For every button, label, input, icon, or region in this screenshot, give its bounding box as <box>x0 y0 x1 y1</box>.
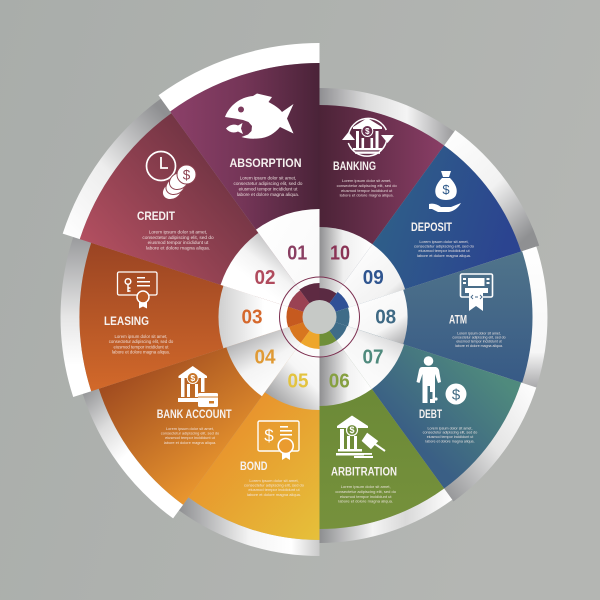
text: atm description: Lorem ipsum dolor sit amet, <box>457 331 501 335</box>
number 09: 09 <box>363 266 384 289</box>
panel: credit <box>63 99 320 317</box>
icon: bank with circular arrows <box>342 118 394 156</box>
number 05: 05 <box>288 370 308 392</box>
text: credit description: eiusmod tempor incididunt ut <box>148 240 209 246</box>
icon: person with ball and chain and coin <box>416 356 466 404</box>
icon: bank with gavel: $ <box>349 425 355 435</box>
heading: credit: CREDIT <box>137 209 176 223</box>
heading: arbitration: ARBITRATION <box>331 465 397 479</box>
text: banking description: eiusmod tempor incididunt ut <box>341 188 393 193</box>
text: credit description: labore et dolore magna aliqua. <box>146 246 210 252</box>
icon: bank with circular arrows: $ <box>365 127 370 136</box>
text: arbitration description: labore et dolore magna aliqua. <box>338 498 393 504</box>
heading: bond: BOND <box>240 459 268 473</box>
icon: bank with credit card <box>178 366 218 407</box>
icon: bond certificate: $ <box>264 426 274 445</box>
text: absorption description: consectetur adipiscing elit, sed do <box>234 181 303 186</box>
number 02: 02 <box>254 266 276 289</box>
panel: debt <box>320 317 536 502</box>
heading: leasing: LEASING <box>104 314 149 328</box>
heading: atm: ATM <box>449 313 467 327</box>
text: leasing description: Lorem ipsum dolor sit amet, <box>114 334 168 339</box>
panel: banking <box>320 88 454 317</box>
text: deposit description: eiusmod tempor incididunt ut <box>418 248 470 253</box>
text: bond description: Lorem ipsum dolor sit amet, <box>249 478 299 483</box>
heading: deposit: DEPOSIT <box>411 220 453 234</box>
icon: atm machine <box>460 274 492 311</box>
text: leasing description: consectetur adipiscing elit, sed do <box>109 339 174 344</box>
icon: bank with gavel <box>336 416 385 458</box>
icon: clock and coins: $ <box>183 168 191 182</box>
text: leasing description: labore et dolore magna aliqua. <box>112 350 170 354</box>
text: debt description: eiusmod tempor incididunt ut <box>427 435 473 439</box>
text: debt description: consectetur adipiscing elit, sed do <box>423 431 477 435</box>
panel: bond <box>179 317 320 556</box>
text: bank account description: Lorem ipsum dolor sit amet, <box>166 426 214 431</box>
icon: bank with credit card: $ <box>190 373 195 383</box>
icon: big fish eating small fish <box>225 94 294 139</box>
text: arbitration description: Lorem ipsum dolor sit amet, <box>341 484 391 489</box>
text: leasing description: eiusmod tempor incididunt ut <box>114 344 169 350</box>
text: absorption description: Lorem ipsum dolor sit amet, <box>240 176 296 180</box>
number 08: 08 <box>375 306 396 328</box>
text: absorption description: labore et dolore magna aliqua. <box>237 192 299 197</box>
text: absorption description: eiusmod tempor incididunt ut <box>239 186 298 191</box>
text: bond description: consectetur adipiscing elit, sed do <box>244 482 305 488</box>
inner numbered wheel <box>218 209 408 410</box>
panel: absorption <box>158 43 320 317</box>
text: atm description: consectetur adipiscing elit, sed do <box>452 336 506 340</box>
text: banking description: Lorem ipsum dolor sit amet, <box>342 178 391 183</box>
panel: arbitration <box>320 317 452 543</box>
panel: leasing <box>61 237 320 397</box>
text: debt description: Lorem ipsum dolor sit amet, <box>428 426 472 430</box>
text: atm description: eiusmod tempor incididunt ut <box>456 340 502 344</box>
text: deposit description: labore et dolore magna aliqua. <box>417 253 471 258</box>
text: arbitration description: eiusmod tempor incididunt ut <box>340 494 392 499</box>
text: atm description: labore et dolore magna aliqua. <box>455 344 503 348</box>
heading: bank account: BANK ACCOUNT <box>157 407 232 421</box>
icon: person with ball and chain and coin: $ <box>452 386 461 404</box>
text: credit description: Lorem ipsum dolor sit amet, <box>149 230 207 236</box>
number 07: 07 <box>362 346 384 368</box>
text: bank account description: eiusmod tempor incididunt ut <box>165 435 216 440</box>
panel: bank account <box>83 317 320 518</box>
text: arbitration description: consectetur adipiscing elit, sed do <box>335 489 397 494</box>
text: credit description: consectetur adipiscing elit, sed do <box>142 235 214 241</box>
panel: deposit <box>320 130 539 317</box>
heading: absorption: ABSORPTION <box>230 156 302 170</box>
text: deposit description: Lorem ipsum dolor sit amet, <box>419 239 469 244</box>
text: banking description: consectetur adipiscing elit, sed do <box>337 183 397 188</box>
center ring with colored segments <box>280 277 360 357</box>
number 10: 10 <box>330 242 350 264</box>
text: debt description: labore et dolore magna aliqua. <box>425 440 475 444</box>
icon: leasing certificate <box>118 272 157 308</box>
icon: bond certificate <box>258 421 299 460</box>
text: bond description: labore et dolore magna aliqua. <box>247 492 301 497</box>
number 03: 03 <box>242 306 262 328</box>
text: bank account description: consectetur adipiscing elit, sed do <box>161 430 219 436</box>
heading: debt: DEBT <box>419 407 443 421</box>
panel: atm <box>320 246 547 388</box>
number 04: 04 <box>254 346 276 368</box>
icon: money bag in hand: $ <box>442 182 450 197</box>
icon: money bag in hand <box>429 171 461 212</box>
icon: clock and coins <box>146 152 196 203</box>
text: bank account description: labore et dolore magna aliqua. <box>164 440 216 445</box>
number 06: 06 <box>329 370 350 392</box>
heading: banking: BANKING <box>333 159 376 173</box>
text: bond description: eiusmod tempor incididunt ut <box>248 487 300 492</box>
text: banking description: labore et dolore magna aliqua. <box>340 192 394 198</box>
text: deposit description: consectetur adipiscing elit, sed do <box>414 244 475 248</box>
number 01: 01 <box>287 242 307 264</box>
